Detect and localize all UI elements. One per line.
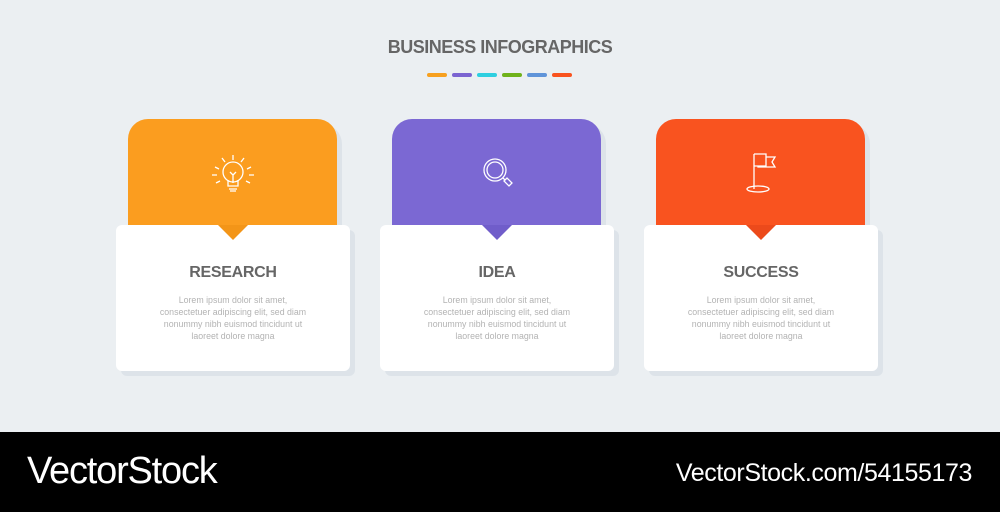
id text: VectorStock.com/54155173 — [676, 459, 972, 487]
text block: laoreet dolore magna — [455, 331, 539, 341]
text block: nonummy nibh euismod tincidunt ut — [692, 319, 830, 329]
pointer — [746, 225, 776, 240]
title: BUSINESS INFOGRAPHICS — [388, 37, 612, 57]
text block: laoreet dolore magna — [719, 331, 803, 341]
icon: magnifier — [483, 158, 513, 187]
icon: light bulb — [212, 155, 254, 192]
heading: RESEARCH — [189, 264, 277, 281]
white text box — [380, 225, 614, 371]
pointer — [482, 225, 512, 240]
text block — [688, 295, 834, 341]
panel: research — [116, 119, 355, 376]
heading: SUCCESS — [723, 264, 799, 281]
text block: Lorem ipsum dolor sit amet, — [179, 295, 287, 305]
text block: nonummy nibh euismod tincidunt ut — [164, 319, 302, 329]
text block: Lorem ipsum dolor sit amet, — [707, 295, 815, 305]
color dashes — [427, 73, 572, 77]
header block — [656, 119, 865, 229]
icon: flag — [746, 153, 776, 193]
text block: consectetuer adipiscing elit, sed diam — [160, 307, 306, 317]
text block: laoreet dolore magna — [191, 331, 275, 341]
footer bar — [0, 432, 1000, 512]
text block: Lorem ipsum dolor sit amet, — [443, 295, 551, 305]
text block: consectetuer adipiscing elit, sed diam — [424, 307, 570, 317]
panel: idea — [380, 119, 619, 376]
panel: success — [644, 119, 883, 376]
header block — [128, 119, 337, 229]
text block — [160, 295, 306, 341]
heading: IDEA — [478, 264, 516, 281]
header block — [392, 119, 601, 229]
white text box — [644, 225, 878, 371]
white text box — [116, 225, 350, 371]
text block: consectetuer adipiscing elit, sed diam — [688, 307, 834, 317]
pointer — [218, 225, 248, 240]
text block: nonummy nibh euismod tincidunt ut — [428, 319, 566, 329]
text block — [424, 295, 570, 341]
logo text: VectorStock — [27, 450, 217, 492]
